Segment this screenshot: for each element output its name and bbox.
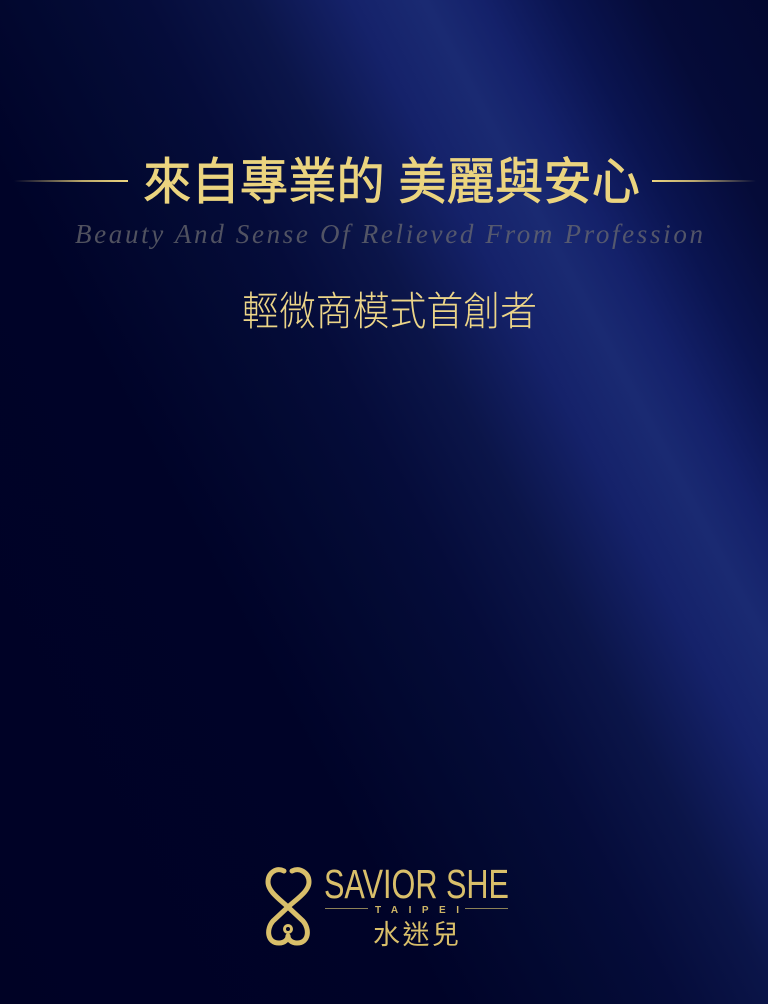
logo: Savior She Taipei (268, 861, 509, 950)
icon: stethoscope figure-eight emblem (268, 870, 309, 943)
brand name: SAVIOR SHE (324, 861, 509, 907)
subtitle: 輕微商模式首創者 (242, 290, 537, 334)
left logo rule (325, 908, 368, 909)
right title rule (652, 180, 756, 182)
Chinese brand name: 水迷兒 (373, 920, 459, 950)
title: 來自專業的 美麗與安心 (143, 154, 640, 210)
Taipei label: TAIPEI (375, 905, 459, 916)
English script tagline: Beauty And Sense Of Relieved From Profession (75, 219, 703, 249)
right logo rule (465, 908, 508, 909)
left title rule (14, 180, 128, 182)
